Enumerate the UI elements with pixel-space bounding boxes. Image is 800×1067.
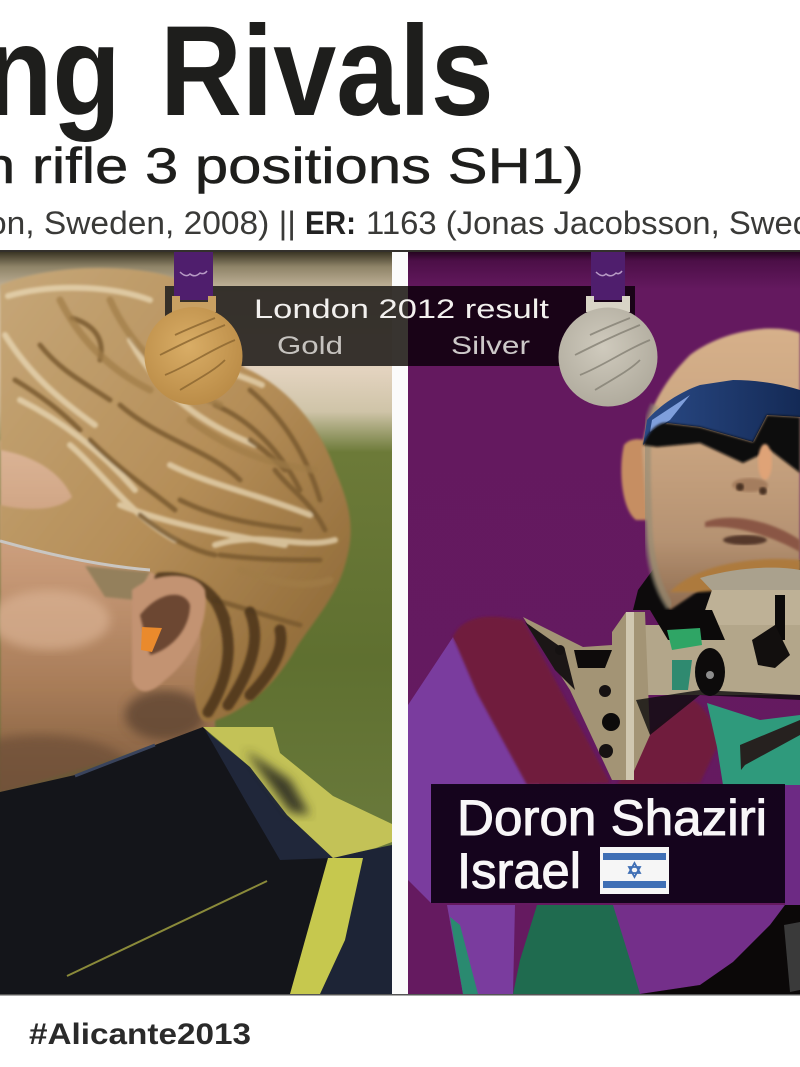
records line — [0, 205, 800, 241]
portrait: rifle cheek rest and sights — [523, 559, 800, 780]
panel: Swedish shooter photo — [0, 252, 392, 994]
hashtag: #Alicante2013 — [29, 1018, 251, 1051]
title — [0, 0, 494, 143]
records line: ER: — [305, 205, 356, 241]
banner heading: London 2012 result — [254, 294, 550, 324]
portrait: head and face — [621, 329, 800, 610]
icon: silver medal — [558, 252, 658, 406]
title: Rivals — [160, 0, 494, 143]
country name: Israel — [457, 843, 581, 899]
icon: gold medal — [144, 252, 242, 405]
records line: 1163 (Jonas Jacobsson, Swed — [366, 205, 800, 241]
portrait: face and neck — [0, 440, 215, 805]
centre divider — [392, 252, 408, 994]
icon: Israeli flag — [600, 847, 669, 894]
athlete name: Doron Shaziri — [457, 790, 767, 846]
portrait: clothing — [408, 617, 800, 994]
photo edge lines — [0, 250, 800, 996]
portrait: dark jacket — [0, 727, 392, 994]
athlete name box: Doron Shaziri, Israel — [431, 784, 785, 903]
silver label: Silver — [451, 332, 530, 360]
portrait: ear with orange ear plug — [132, 576, 206, 691]
portrait: hair — [0, 268, 351, 722]
panel: Israeli shooter photo — [408, 252, 800, 994]
portrait: glasses arm — [0, 541, 150, 570]
result banner — [165, 286, 635, 366]
gold label: Gold — [277, 332, 343, 360]
